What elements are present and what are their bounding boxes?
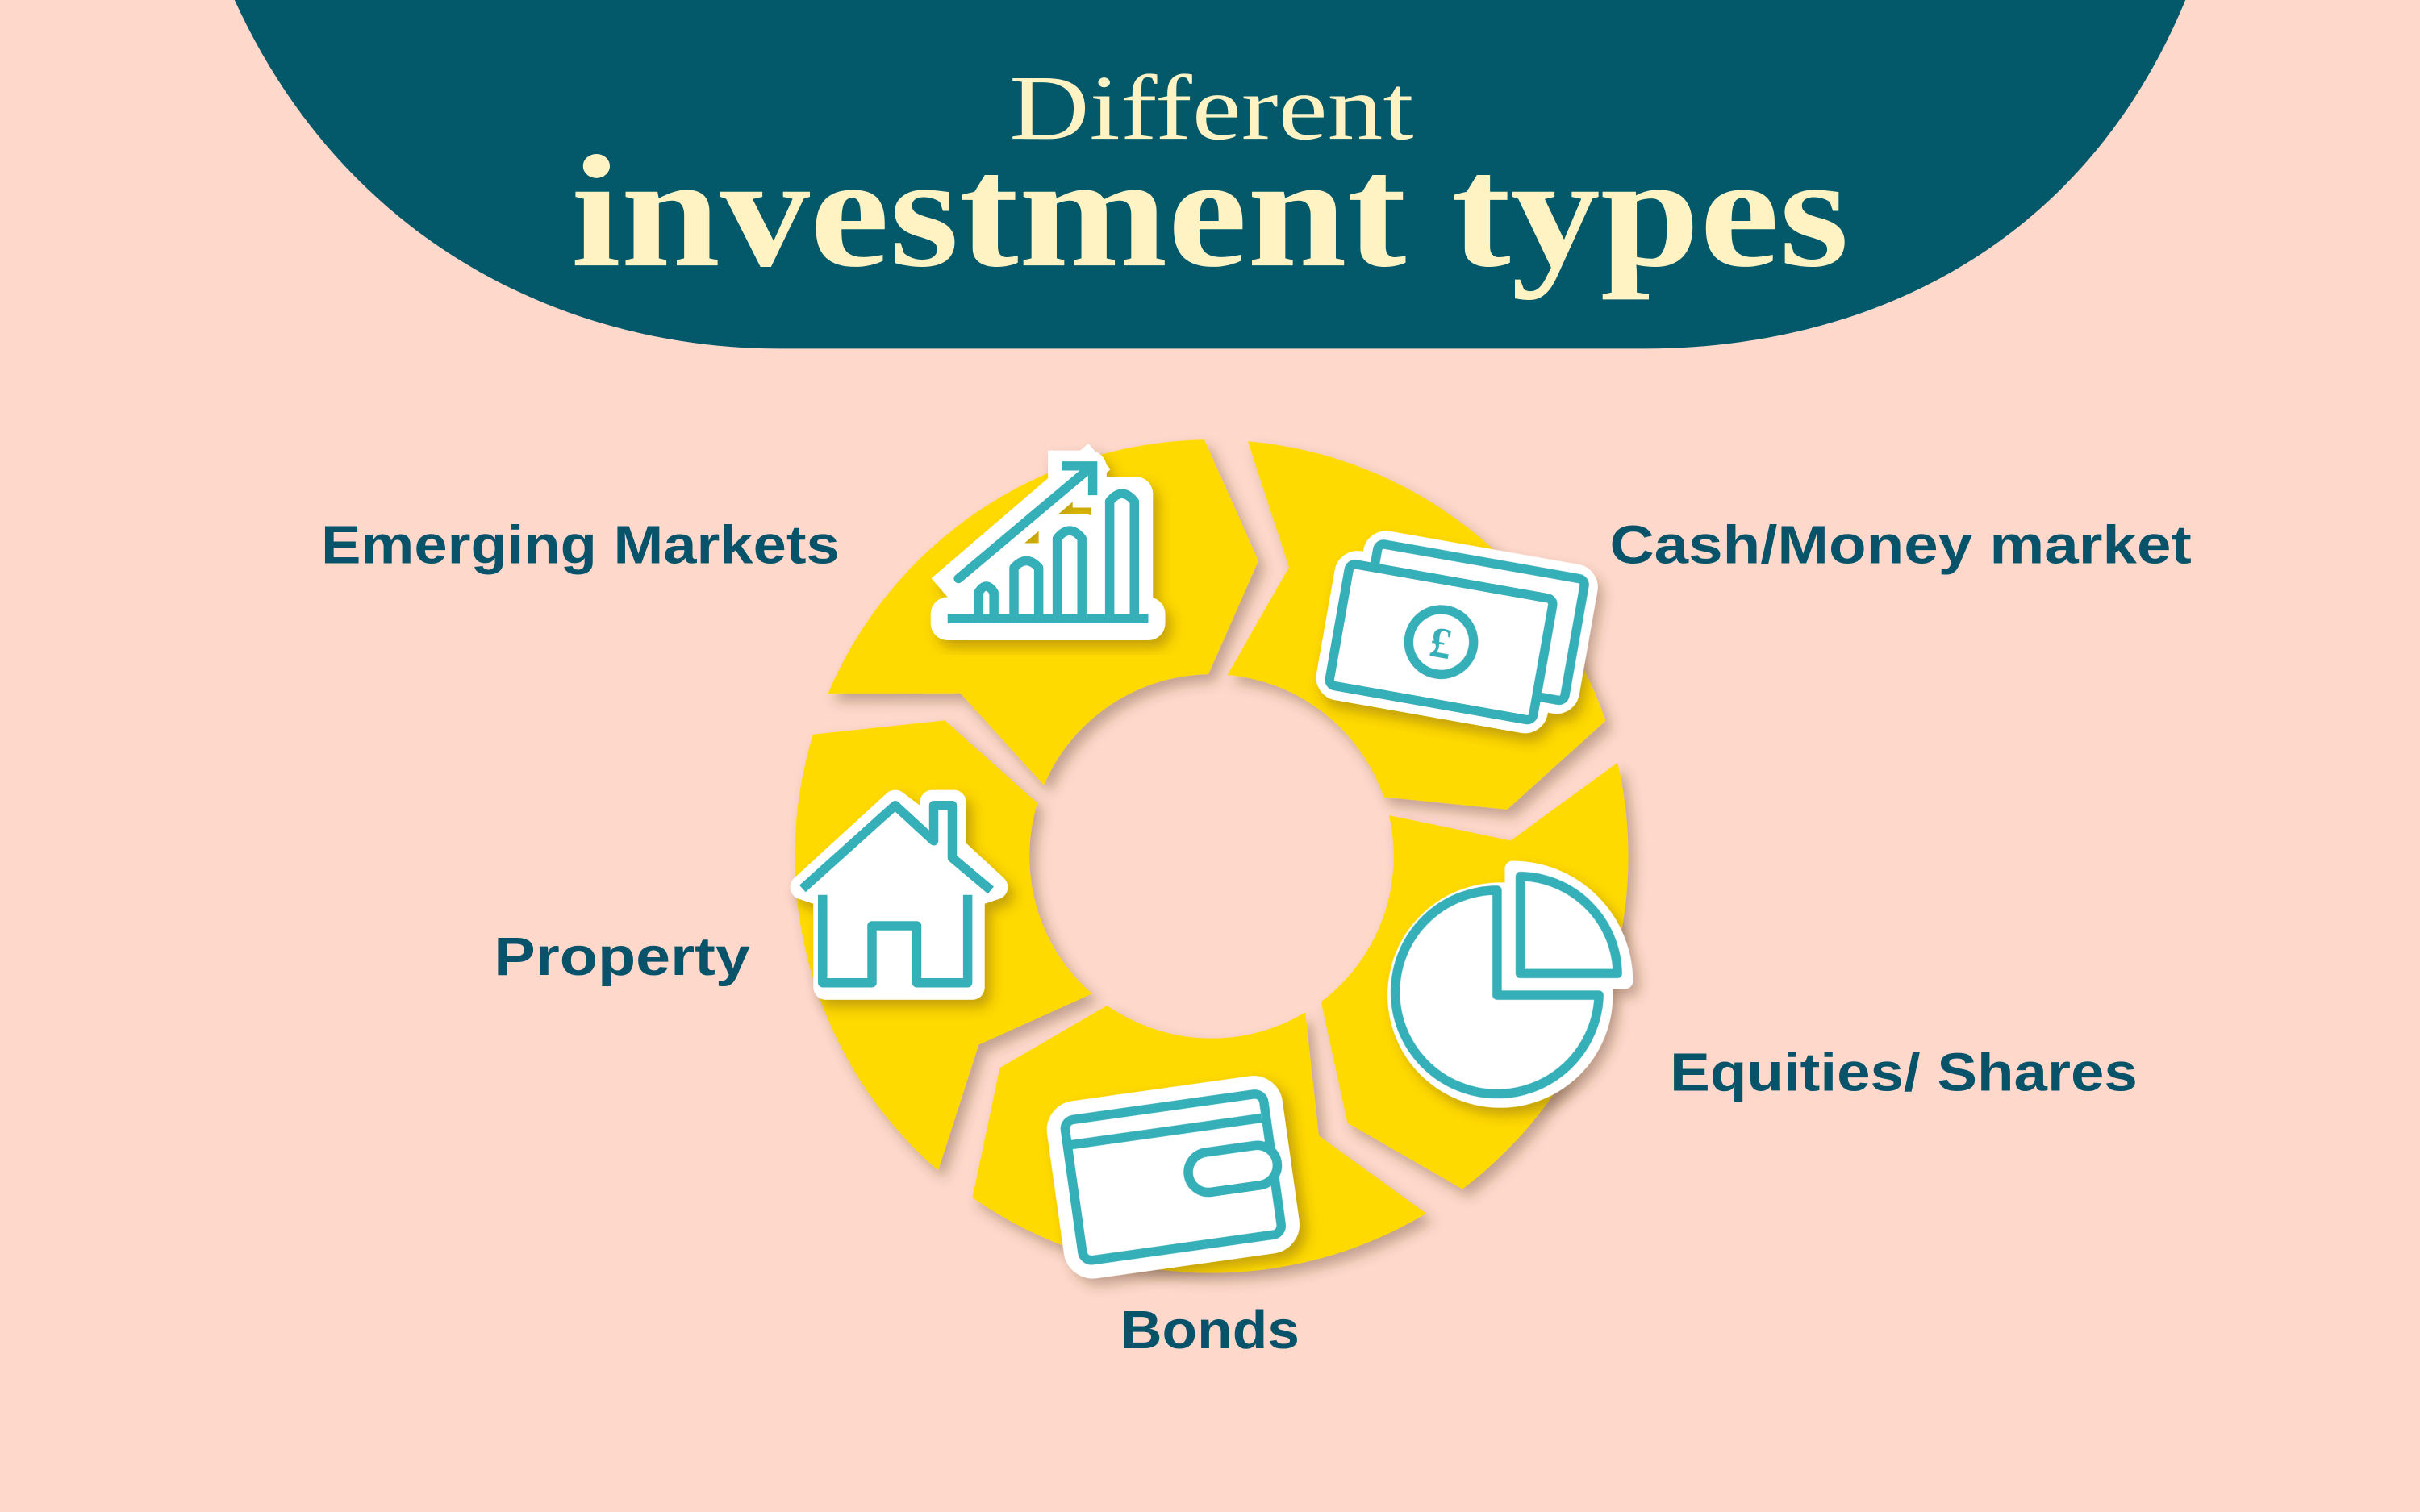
label: Property: Property — [494, 927, 750, 987]
label: Bonds: Bonds — [1120, 1300, 1300, 1360]
title: Different — [1009, 56, 1414, 159]
label: Cash/Money market: Cash/Money market — [1610, 514, 2192, 575]
label: Equities/ Shares: Equities/ Shares — [1670, 1043, 2138, 1103]
label: Emerging Markets: Emerging Markets — [321, 514, 840, 575]
icon: pie chart — [1387, 868, 1625, 1108]
icon: cash notes: £ — [1426, 617, 1456, 669]
icon: house — [803, 802, 995, 987]
icon: growth chart — [948, 466, 1148, 623]
title: investment types — [571, 123, 1849, 301]
title — [571, 56, 1849, 301]
labels — [321, 514, 2192, 1360]
icon: cash notes — [1325, 535, 1589, 729]
ring of arrows — [651, 344, 1703, 1410]
header banner — [235, 0, 2185, 348]
icon: wallet — [1055, 1085, 1291, 1270]
